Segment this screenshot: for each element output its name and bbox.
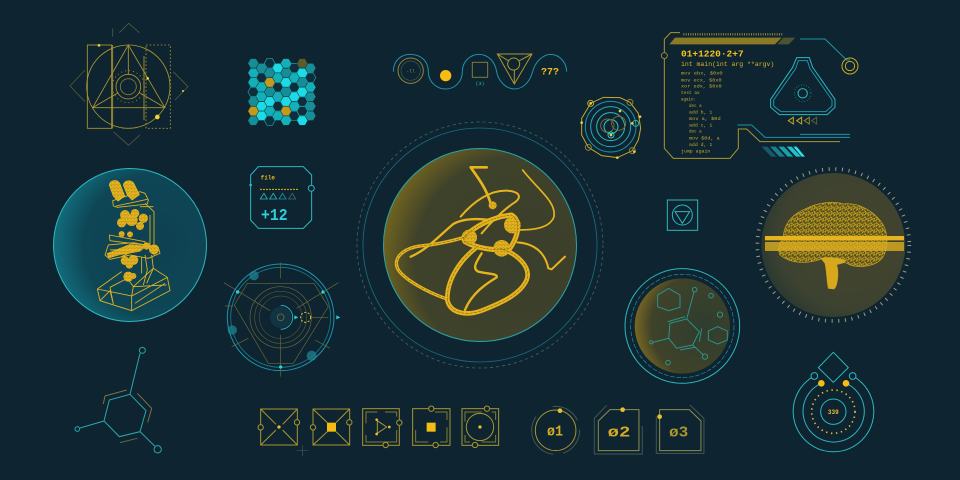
dotted ring emblem: 339 xyxy=(828,409,839,416)
code listing: again: xyxy=(681,96,696,102)
honeycomb hex grid xyxy=(248,59,316,125)
code listing: add d, 1 xyxy=(689,142,713,148)
code listing: int main(int arg **argv) xyxy=(681,61,774,68)
code listing: mov ecx, $0x0 xyxy=(681,77,722,83)
code title: 01+1220·2+7 xyxy=(681,50,744,60)
brain mesh xyxy=(779,202,887,289)
badge 01: ø1 xyxy=(547,425,563,441)
targeting reticle xyxy=(224,263,340,377)
badge 03 xyxy=(656,405,704,453)
code listing: test ax xyxy=(681,90,700,96)
hatch stripes xyxy=(762,147,805,157)
icon: crossed square dot xyxy=(258,409,300,445)
code listing: xor edx, $0x0 xyxy=(681,84,722,90)
badge 02: ø2 xyxy=(608,425,630,441)
arrow triangles xyxy=(788,117,817,124)
wavy icon strip: (3) xyxy=(475,81,484,87)
wavy icon strip: -ll xyxy=(406,69,415,75)
sacred geometry diagram xyxy=(70,23,188,145)
code listing xyxy=(681,61,774,155)
scan bars xyxy=(765,236,904,240)
bottom icon row xyxy=(258,405,704,456)
central specimen xyxy=(357,122,603,368)
hexagon molecule xyxy=(75,347,161,453)
badge 03: ø3 xyxy=(669,425,689,441)
icon: crossed square block xyxy=(310,409,352,445)
icon: square circle xyxy=(462,406,499,448)
code terminal panel xyxy=(661,33,858,158)
code listing: mov $0d, a xyxy=(689,135,720,141)
tentacled organism xyxy=(396,167,565,313)
code listing: mov a, $0d xyxy=(689,116,721,122)
microscope wireframe xyxy=(97,181,170,311)
triangle button xyxy=(667,200,698,230)
file card: file xyxy=(261,174,275,181)
microscope globe xyxy=(54,168,206,322)
molecule globe xyxy=(625,269,740,383)
file card xyxy=(249,167,314,228)
code listing: dec a xyxy=(689,103,702,109)
code listing: add b, 1 xyxy=(689,109,713,115)
dotted ring emblem xyxy=(793,352,874,452)
orbit diagram xyxy=(580,97,641,159)
file card: +12 xyxy=(261,207,288,226)
wavy icon strip: ?7? xyxy=(541,66,559,77)
icon: triangle square xyxy=(363,409,402,448)
icon: square block xyxy=(413,406,450,448)
code listing: jump again xyxy=(681,149,711,155)
code listing: add c, 1 xyxy=(689,123,713,129)
code listing: dec a xyxy=(689,129,702,135)
code listing: mov ebx, $0x0 xyxy=(681,71,723,77)
badge 02 xyxy=(594,405,642,454)
wavy icon strip xyxy=(393,54,567,89)
brain globe xyxy=(757,169,909,321)
triangle emblem xyxy=(771,58,835,115)
badge 01 xyxy=(532,406,580,454)
